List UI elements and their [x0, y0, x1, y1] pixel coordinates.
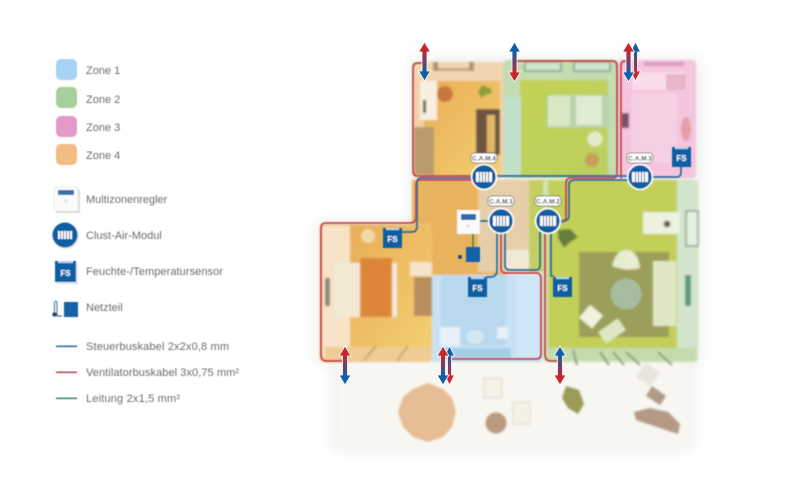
round chair: [585, 153, 599, 167]
line sample: Ventilatorbuskabel: [56, 372, 77, 373]
sensor: FS zone 3: [672, 147, 691, 167]
terrace chair left: [484, 378, 530, 424]
room: hall: [412, 180, 549, 277]
rooms: [320, 60, 698, 365]
sensor: FS zone 2: [553, 277, 572, 297]
line sample: Leitung: [56, 398, 77, 399]
sensor: FS zone 1: FS: [472, 284, 483, 293]
terrace plant: [562, 386, 584, 414]
room controller: [457, 210, 480, 234]
red ventilator cables: [321, 61, 628, 361]
label: zone 2: Zone 2: [86, 94, 120, 106]
arrow: bathroom airflow back: [444, 346, 454, 385]
terrace furniture: [634, 386, 680, 434]
power supply: [458, 247, 480, 262]
sofa unit: [476, 109, 500, 155]
room: kitchen pink: [618, 60, 696, 178]
module: C.A.M.4: [471, 153, 497, 190]
sensor: FS zone 4: FS: [387, 235, 398, 244]
terrace white chair: [636, 363, 660, 387]
cables: [321, 61, 681, 361]
parasol: [398, 383, 456, 442]
blue control cables: [402, 166, 681, 277]
swatch: zone 3: [56, 116, 77, 137]
swatch: zone 1: [56, 59, 77, 80]
swatch: zone 4: [56, 144, 77, 165]
icon: Netzteil: [52, 301, 78, 317]
label: zone 3: Zone 3: [86, 122, 120, 134]
chair: [437, 86, 453, 102]
line sample: Steuerbuskabel: [56, 346, 77, 347]
bath oval: [681, 117, 691, 141]
window: [686, 211, 698, 246]
icon: Feuchte-/Temperatursensor: [55, 261, 78, 284]
room: study: [413, 62, 503, 178]
icon: Multizonenregler: [54, 187, 80, 213]
arrow: bedroom airflow: [508, 42, 520, 82]
arrow: kitchen airflow front: [622, 42, 634, 82]
arrow: kitchen airflow back: [630, 42, 640, 81]
door slats bedroom: [364, 346, 408, 361]
sensor: FS zone 3: FS: [676, 154, 687, 163]
room: bedroom left: [320, 224, 432, 362]
module: C.A.M.1: [488, 196, 514, 234]
armchair top: [612, 250, 640, 270]
terrace table: [486, 412, 506, 434]
label: zone 4: Zone 4: [86, 150, 120, 162]
arrow: bathroom airflow front: [437, 346, 449, 385]
arrow: living airflow: [554, 346, 566, 385]
module: C.A.M.3: C.A.M.3: [628, 156, 652, 162]
plant: [558, 229, 578, 248]
swatch: zone 2: [56, 87, 77, 108]
armchairs bottom: [579, 305, 603, 329]
sensor: FS zone 2: FS: [557, 284, 568, 293]
dining table: [643, 212, 680, 234]
sofa: [653, 261, 676, 326]
label: Netzteil: Netzteil: [86, 302, 123, 314]
module: C.A.M.1: C.A.M.1: [489, 198, 513, 206]
label: Clust-Air-Modul: Clust-Air-Modul: [86, 230, 162, 242]
legend: [52, 59, 239, 405]
wall picture: [685, 275, 691, 306]
bed: [547, 95, 609, 128]
carpet: [579, 252, 669, 337]
arrow: bedroom left airflow: [339, 346, 351, 385]
plant: [478, 85, 492, 98]
module: C.A.M.4: C.A.M.4: [472, 156, 496, 162]
label: Ventilatorbuskabel: Ventilatorbuskabel 3x0,75 mm²: [86, 367, 239, 379]
arrow: study airflow: [418, 42, 430, 81]
module: C.A.M.2: C.A.M.2: [536, 198, 560, 206]
round table: [588, 132, 602, 146]
module: C.A.M.2: [535, 196, 561, 234]
icon: Clust-Air-Modul: [52, 222, 79, 249]
room: bedroom green: [503, 60, 618, 178]
label: Multizonenregler: Multizonenregler: [86, 194, 168, 206]
label: Leitung: Leitung 2x1,5 mm²: [86, 393, 180, 405]
label: Steuerbuskabel: Steuerbuskabel 2x2x0,8 mm: [86, 341, 229, 353]
bed: [335, 263, 397, 317]
sensor: FS zone 4: [383, 228, 402, 248]
icon: Feuchte-/Temperatursensor: FS: [60, 269, 71, 278]
module: C.A.M.3: [627, 153, 653, 190]
patio door slats: [573, 350, 672, 365]
floor plan: [316, 42, 700, 450]
room: bathroom: [432, 275, 542, 362]
room: living: [543, 180, 698, 362]
green power line: [472, 233, 474, 247]
sensor: FS zone 1: [468, 277, 487, 297]
label: zone 1: Zone 1: [86, 65, 120, 77]
desk: [420, 81, 437, 120]
coffee table: [610, 278, 642, 310]
cabinet: [414, 127, 434, 175]
terrace: [336, 360, 690, 448]
label: Feuchte-/Temperatursensor: Feuchte-/Temperatursensor: [86, 266, 223, 278]
shadow: [316, 58, 700, 450]
